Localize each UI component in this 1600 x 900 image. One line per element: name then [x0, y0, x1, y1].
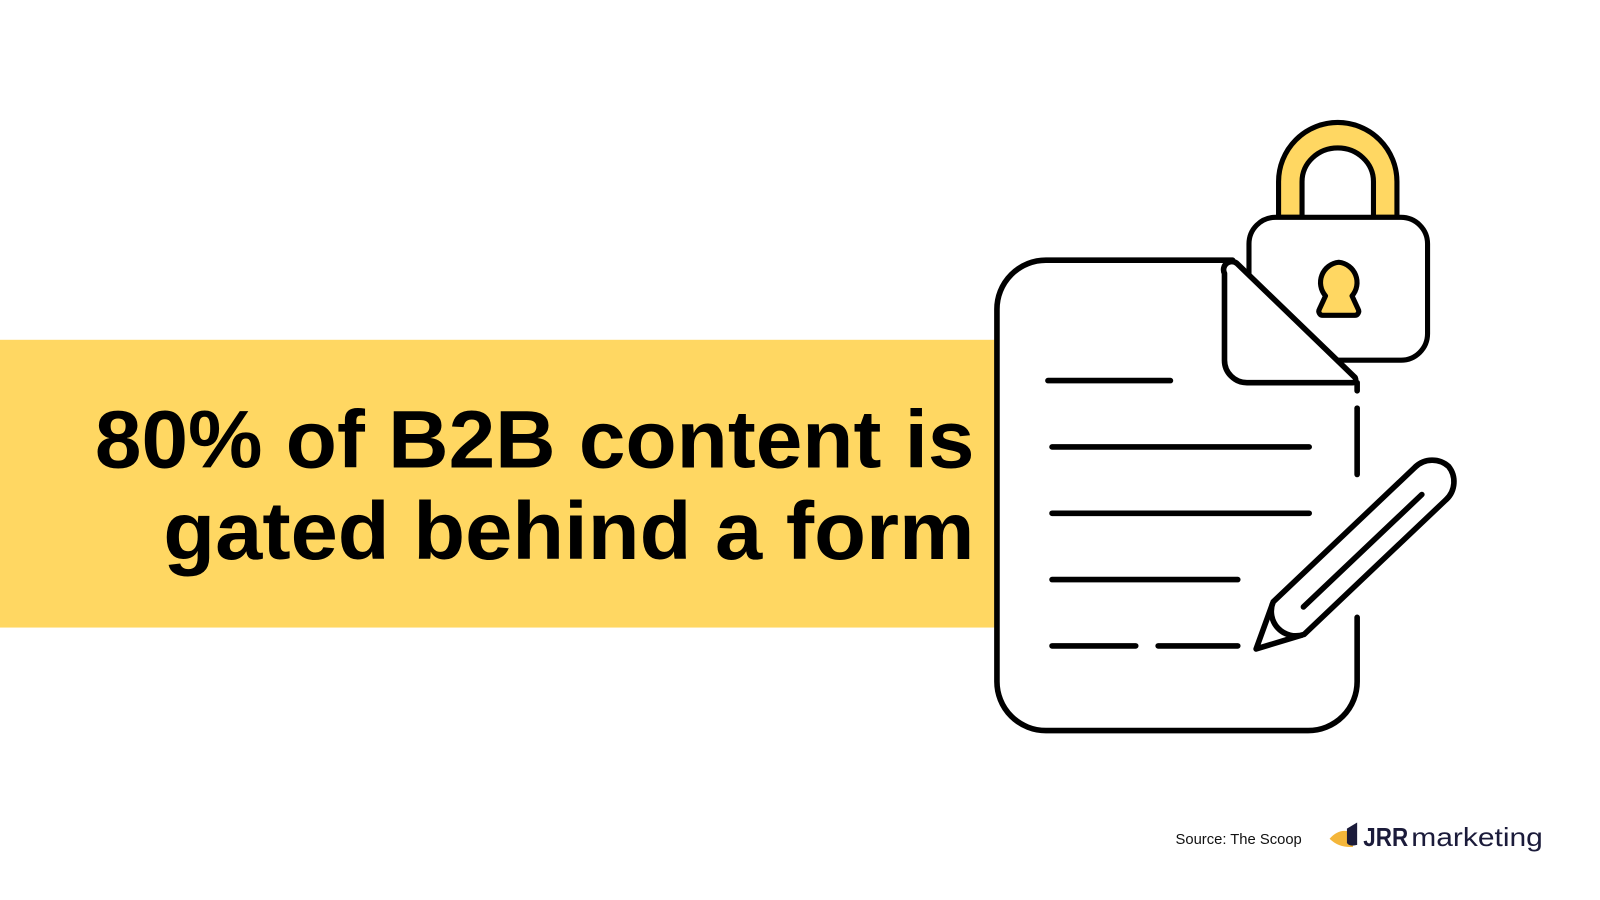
text lines [1048, 381, 1309, 646]
yellow highlight band [0, 340, 995, 628]
icon: document [997, 260, 1357, 731]
icon: padlock [1249, 122, 1428, 360]
icon: pencil [1241, 450, 1464, 665]
headline [95, 394, 974, 577]
headline: gated behind a form [163, 486, 974, 577]
logo: JRR marketing: marketing [1411, 824, 1543, 852]
logo: JRR marketing: JRR [1363, 824, 1408, 852]
logo: JRR marketing [1330, 822, 1543, 852]
headline: 80% of B2B content is [95, 394, 974, 485]
source note: Source: The Scoop [1176, 832, 1302, 848]
document fold [1224, 262, 1356, 383]
